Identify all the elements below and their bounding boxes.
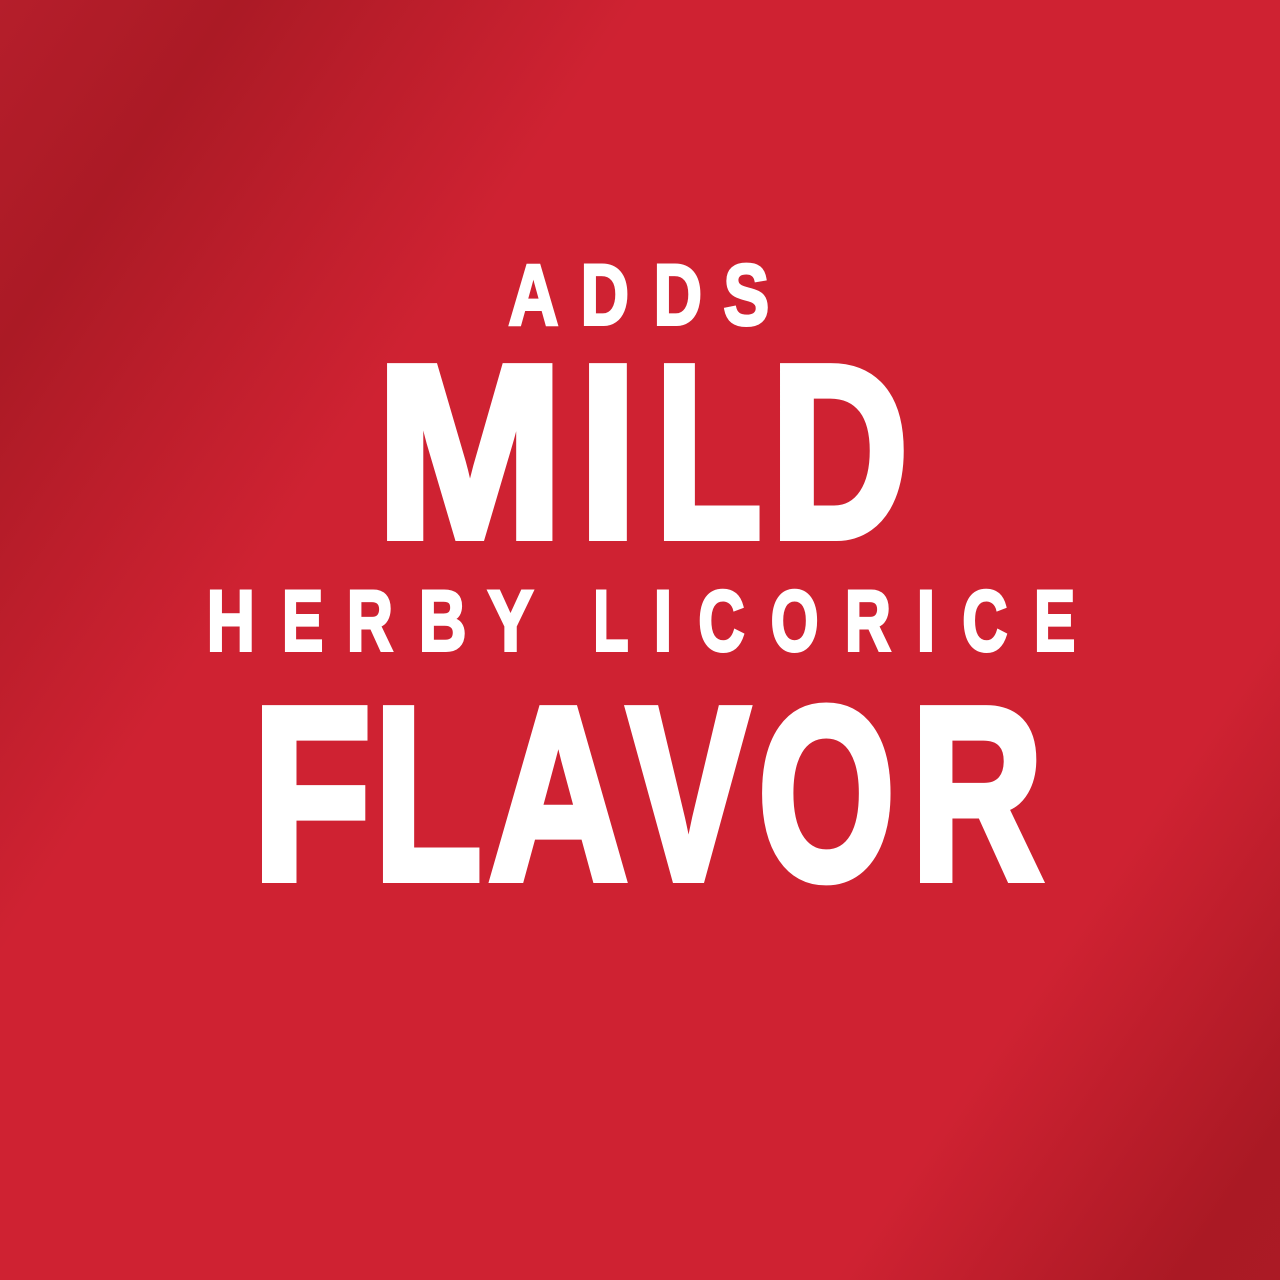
- text: FLAVOR: R: [911, 656, 1043, 932]
- text: ADDS: A: [508, 248, 558, 344]
- text: HERBY LICORICE: C: [698, 574, 745, 670]
- text: HERBY LICORICE: E: [1034, 574, 1075, 670]
- text: ADDS: D: [654, 248, 702, 344]
- text: HERBY LICORICE: I: [917, 574, 935, 670]
- text: ADDS: D: [581, 248, 629, 344]
- text: HERBY LICORICE: B: [419, 574, 466, 670]
- text: MILD: M: [376, 314, 564, 590]
- text: MILD: L: [655, 314, 762, 590]
- text: HERBY LICORICE: C: [962, 574, 1008, 670]
- text: HERBY LICORICE: L: [593, 574, 629, 670]
- text: HERBY LICORICE: Y: [488, 574, 532, 670]
- heading: flavor message: [207, 248, 1075, 932]
- text: HERBY LICORICE: R: [845, 574, 891, 670]
- text: MILD: I: [578, 314, 638, 590]
- text: HERBY LICORICE: R: [347, 574, 393, 670]
- text: FLAVOR: O: [758, 656, 895, 932]
- text: HERBY LICORICE: O: [771, 574, 819, 670]
- text: FLAVOR: F: [252, 656, 372, 932]
- text: MILD: D: [770, 314, 909, 590]
- text: HERBY LICORICE: I: [654, 574, 672, 670]
- text: FLAVOR: L: [374, 656, 482, 932]
- text: HERBY LICORICE: E: [282, 574, 323, 670]
- text: ADDS: S: [723, 248, 769, 344]
- text: HERBY LICORICE: H: [207, 574, 255, 670]
- text: FLAVOR: A: [488, 656, 628, 932]
- text: FLAVOR: V: [627, 656, 750, 932]
